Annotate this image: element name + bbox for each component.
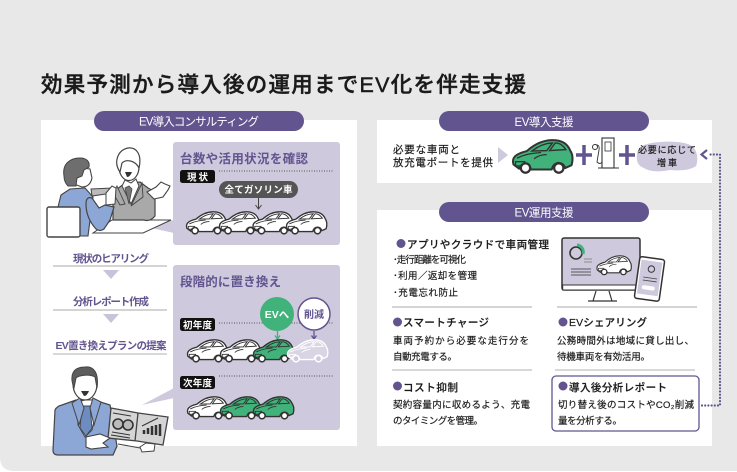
block: スマートチャージ: 自動充電する。 [393, 351, 457, 363]
text: 必要な車両と放充電ポートを提供: 放充電ポートを提供 [393, 156, 494, 169]
callout: 削減 [298, 298, 330, 339]
heading: EV導入コンサルティング [94, 111, 304, 131]
title: 効果予測から導入後の運用までEV化を伴走支援 [41, 73, 526, 97]
callout: 必要に応じて増車: 増車 [657, 157, 677, 168]
panel: 台数や活用状況を確認 [173, 142, 340, 245]
block: コスト抑制 [393, 381, 530, 427]
block: EVシェアリング: 待機車両を有効活用。 [557, 351, 650, 363]
heading: EV導入支援: EV導入支援 [514, 115, 574, 129]
block: アプリやクラウドで車両管理: ･走行距離を可視化 [393, 254, 466, 266]
cars: 4 gasoline cars [186, 212, 327, 234]
icon: plus [576, 145, 592, 165]
label: 次年度 [180, 376, 215, 390]
icon: green EV [513, 140, 572, 173]
block: コスト抑制: のタイミングを管理。 [393, 415, 483, 427]
icon: monitor and smartphone [562, 238, 665, 301]
callout: 必要に応じて増車: 必要に応じて [638, 144, 696, 155]
block: スマートチャージ: 車両予約から必要な走行分を [393, 335, 529, 347]
arrow: dotted link from report to additional vehicles [702, 150, 720, 406]
heading: EV導入支援 [439, 111, 649, 131]
block: コスト抑制: コスト抑制 [403, 381, 458, 394]
cars: second year [187, 397, 294, 419]
heading: EV運用支援: EV運用支援 [514, 206, 574, 220]
label: 現状: 現状 [187, 172, 208, 184]
block: アプリやクラウドで車両管理 [393, 238, 550, 299]
label: 現状 [180, 170, 215, 184]
panel: EV導入コンサルティング [41, 111, 357, 455]
text: EV置き換えプランの提案: EV置き換えプランの提案 [56, 339, 167, 352]
callout: EVへ: EVへ [265, 309, 290, 321]
label: 次年度: 次年度 [183, 378, 212, 390]
text: 必要な車両と放充電ポートを提供: 必要な車両と [393, 143, 460, 156]
icon: presenter illustration [53, 367, 174, 455]
block: 導入後分析レポート: 量を分析する。 [558, 415, 622, 427]
block: 導入後分析レポート [552, 376, 699, 431]
heading: 段階的に置き換え: 段階的に置き換え [180, 274, 281, 289]
callout: 必要に応じて増車 [637, 142, 697, 171]
text: 分析レポート作成: 分析レポート作成 [73, 295, 150, 308]
block: 導入後分析レポート: 導入後分析レポート [569, 381, 667, 394]
label: 初年度: 初年度 [183, 320, 212, 332]
block: EVシェアリング: EVシェアリング [569, 316, 648, 329]
panel: 段階的に置き換え [173, 265, 340, 430]
cars: first year [187, 340, 328, 362]
block: アプリやクラウドで車両管理: ･充電忘れ防止 [393, 287, 458, 299]
block: EVシェアリング: 公務時間外は地域に貸し出し、 [557, 335, 694, 347]
arrow: step 2 [103, 314, 119, 323]
icon: hearing illustration [47, 148, 174, 237]
block: アプリやクラウドで車両管理: ･利用／返却を管理 [393, 270, 477, 282]
block: EVシェアリング [557, 316, 694, 363]
block: アプリやクラウドで車両管理: アプリやクラウドで車両管理 [407, 238, 550, 251]
block: スマートチャージ: スマートチャージ [403, 317, 489, 329]
arrow: step 1 [103, 270, 119, 279]
callout: 全てガソリン車: 全てガソリン車 [224, 184, 293, 196]
label: 初年度 [180, 318, 215, 332]
icon: plus [619, 145, 635, 165]
callout: EVへ [260, 297, 294, 339]
arrow [498, 147, 508, 163]
text: 必要な車両と放充電ポートを提供 [393, 143, 494, 169]
callout: 全てガソリン車 [219, 181, 298, 209]
callout: 削減: 削減 [304, 308, 324, 321]
heading: EV運用支援 [439, 202, 649, 222]
heading: EV導入コンサルティング: EV導入コンサルティング [139, 114, 260, 128]
panel: EV導入支援 [377, 111, 712, 183]
icon: charger [592, 138, 619, 168]
panel: EV運用支援 [377, 202, 712, 446]
block: コスト抑制: 契約容量内に収めるよう、充電 [393, 399, 530, 411]
text: 現状のヒアリング: 現状のヒアリング [73, 252, 150, 265]
heading: 台数や活用状況を確認: 台数や活用状況を確認 [180, 151, 308, 166]
block: 導入後分析レポート: 切り替え後のコストやCO₂削減 [558, 399, 694, 411]
block: スマートチャージ [393, 317, 529, 363]
